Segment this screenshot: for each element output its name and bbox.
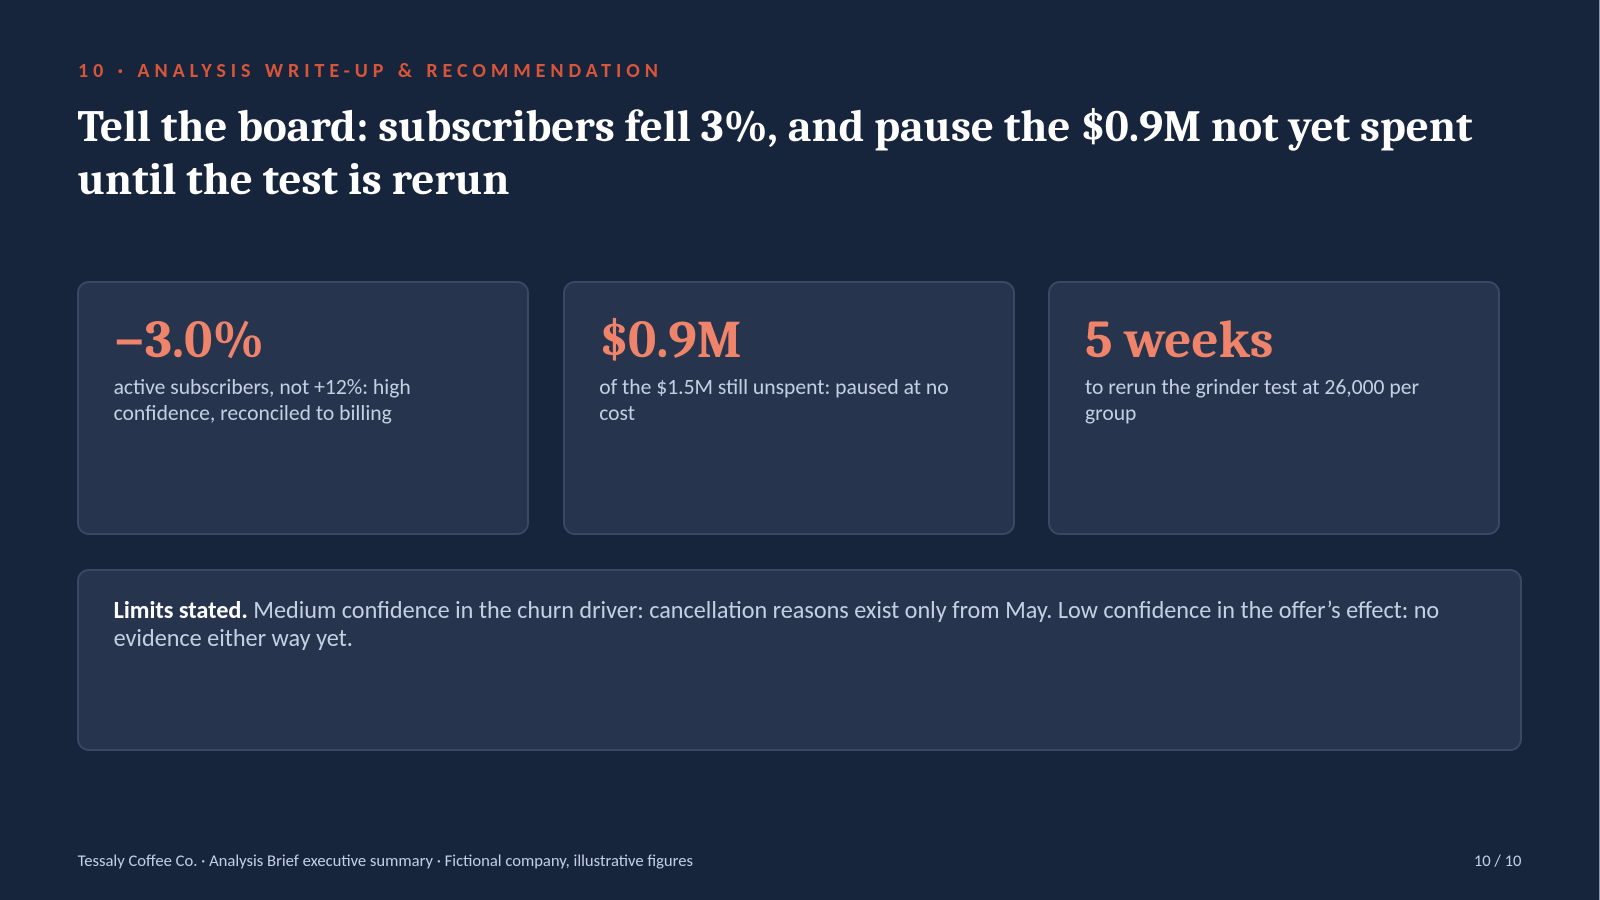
stat description: of the $1.5M still unspent: paused at no (599, 372, 949, 400)
limits text: Limits stated. Medium confidence in the churn driver: cancellation reasons exist only from May. Low confidence in the offer’s effect: no (114, 596, 1439, 624)
panel: subscriber stat (77, 281, 529, 535)
eyebrow label: 10 · ANALYSIS WRITE-UP & RECOMMENDATION (78, 59, 663, 83)
stat description: cost (599, 399, 635, 426)
stat description (599, 372, 949, 426)
panel: unspent budget stat (563, 281, 1015, 535)
stat description (1085, 372, 1419, 426)
stat: minus 3 percent: −3.0% (114, 310, 264, 371)
stat description (114, 372, 411, 426)
stat: 5 weeks: 5 weeks (1085, 310, 1273, 371)
stat description: confidence, reconciled to billing (114, 399, 392, 426)
stat description: to rerun the grinder test at 26,000 per (1085, 372, 1419, 400)
limits text (114, 596, 1439, 653)
stat: 0.9 million: $0.9M (599, 310, 742, 371)
panel: limits stated (77, 569, 1522, 751)
panel: rerun time stat (1048, 281, 1500, 535)
title: Tell the board: subscribers fell 3%, and pause the $0.9M not yet spent (78, 101, 1472, 153)
title (78, 101, 1472, 206)
limits text: evidence either way yet. (114, 624, 353, 653)
stat description: group (1085, 399, 1136, 426)
title: until the test is rerun (78, 154, 509, 206)
page number: 10 / 10 (1474, 851, 1521, 871)
stat description: active subscribers, not +12%: high (114, 372, 411, 400)
footer source note: Tessaly Coffee Co. · Analysis Brief executive summary · Fictional company, illustrative figures (78, 851, 693, 871)
